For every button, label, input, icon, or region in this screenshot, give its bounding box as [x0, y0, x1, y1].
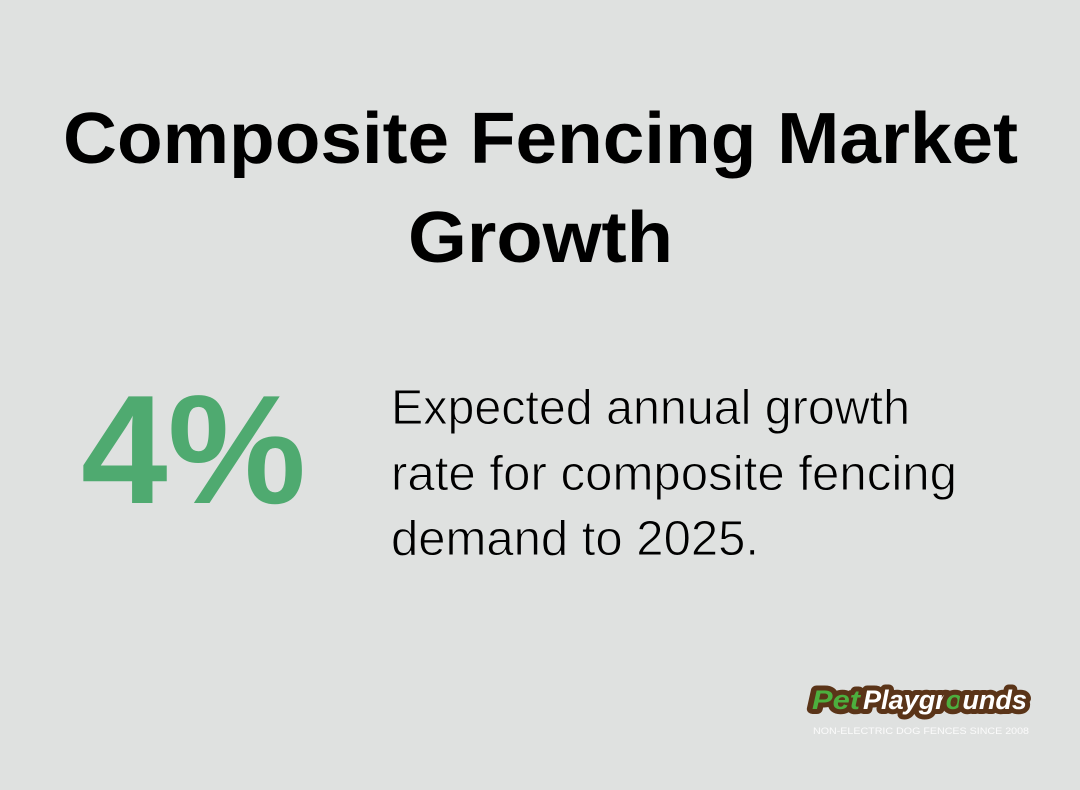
- description text: rate for composite fencing: [391, 447, 957, 501]
- title: [63, 99, 1018, 278]
- logo wordmark: Playgrounds: [863, 685, 1027, 715]
- logo: Pet Playgrounds: [812, 685, 1029, 737]
- statistic: 4%: 4%: [81, 363, 306, 536]
- logo wordmark: Pet: [812, 685, 861, 715]
- description text: [391, 381, 957, 566]
- logo tagline: NON-ELECTRIC DOG FENCES SINCE 2008: [813, 726, 1029, 737]
- title: Composite Fencing Market: [63, 99, 1018, 179]
- title: Growth: [408, 198, 673, 278]
- description text: demand to 2025.: [391, 512, 759, 566]
- description text: Expected annual growth: [391, 381, 910, 435]
